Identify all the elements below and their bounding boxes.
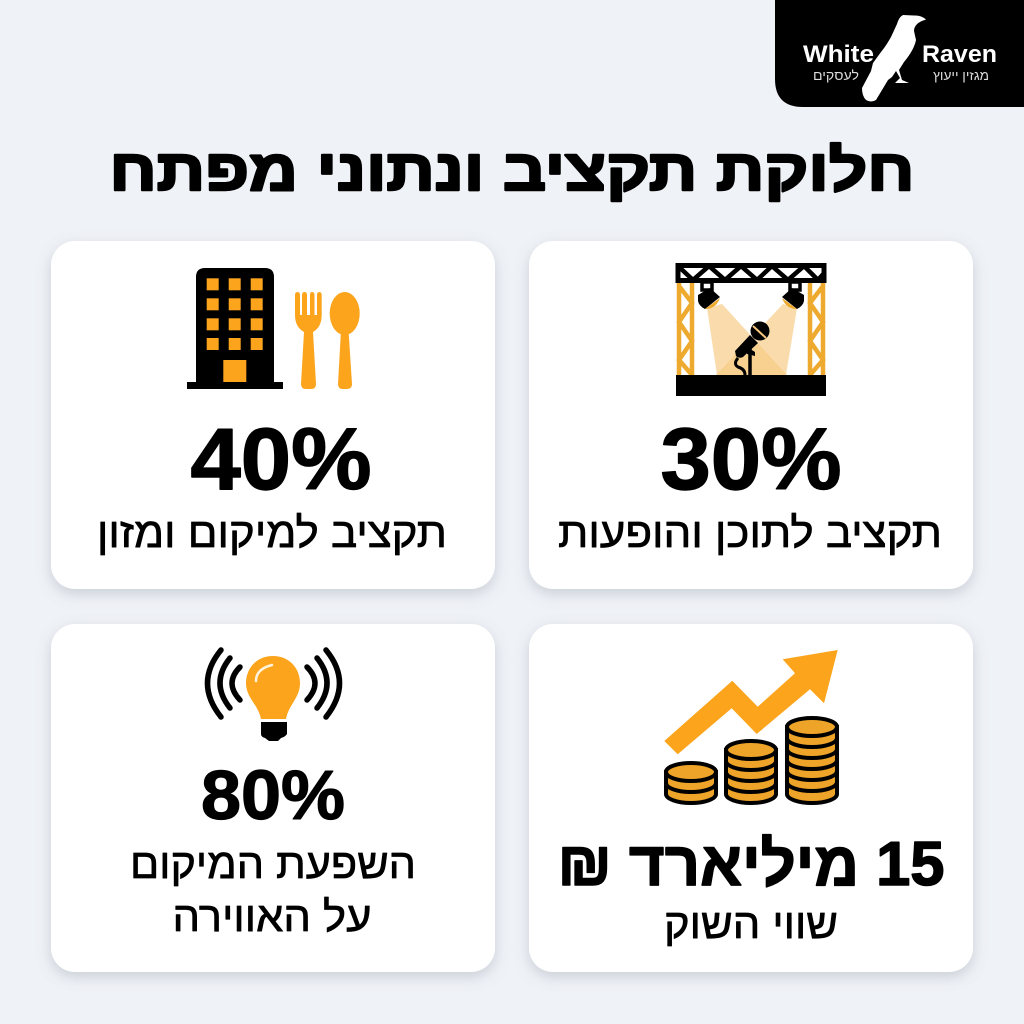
- logo tagline right: מגזין ייעוץ: [933, 68, 989, 83]
- stat: 30%: 30%: [660, 411, 842, 508]
- panel: venue and food: [51, 241, 495, 589]
- label: market value: שווי השוק: [664, 900, 838, 947]
- stat: 15 billion shekels: 15 מיליארד ₪: [558, 830, 944, 899]
- label: budget for content and shows: תקציב לתוכן והופעות: [558, 509, 942, 556]
- logo tagline left: לעסקים: [813, 68, 859, 83]
- icon: rising arrow over coin stacks: [664, 650, 838, 803]
- logo raven silhouette: [862, 15, 926, 102]
- icon: light bulb with waves: [208, 650, 340, 741]
- stat: 40%: 40%: [190, 411, 372, 508]
- panel: venue influence on atmosphere: [51, 624, 495, 972]
- panel: market value: [529, 624, 973, 972]
- label: venue influence: השפעת המיקום: [130, 840, 416, 887]
- logo: White Raven: [775, 0, 1024, 107]
- panel: content and shows: [529, 241, 973, 589]
- icon: stage with spotlights and microphone: [676, 266, 826, 396]
- stat: 80%: 80%: [201, 756, 345, 834]
- icon: building with fork and spoon: [187, 268, 360, 389]
- logo wordmark Raven: Raven: [922, 41, 997, 68]
- logo wordmark White: White: [803, 41, 874, 68]
- title: חלוקת תקציב ונתוני מפתח: [110, 138, 915, 203]
- label: on the atmosphere: על האווירה: [172, 893, 372, 940]
- label: budget for venue and food: תקציב למיקום ומזון: [97, 509, 447, 556]
